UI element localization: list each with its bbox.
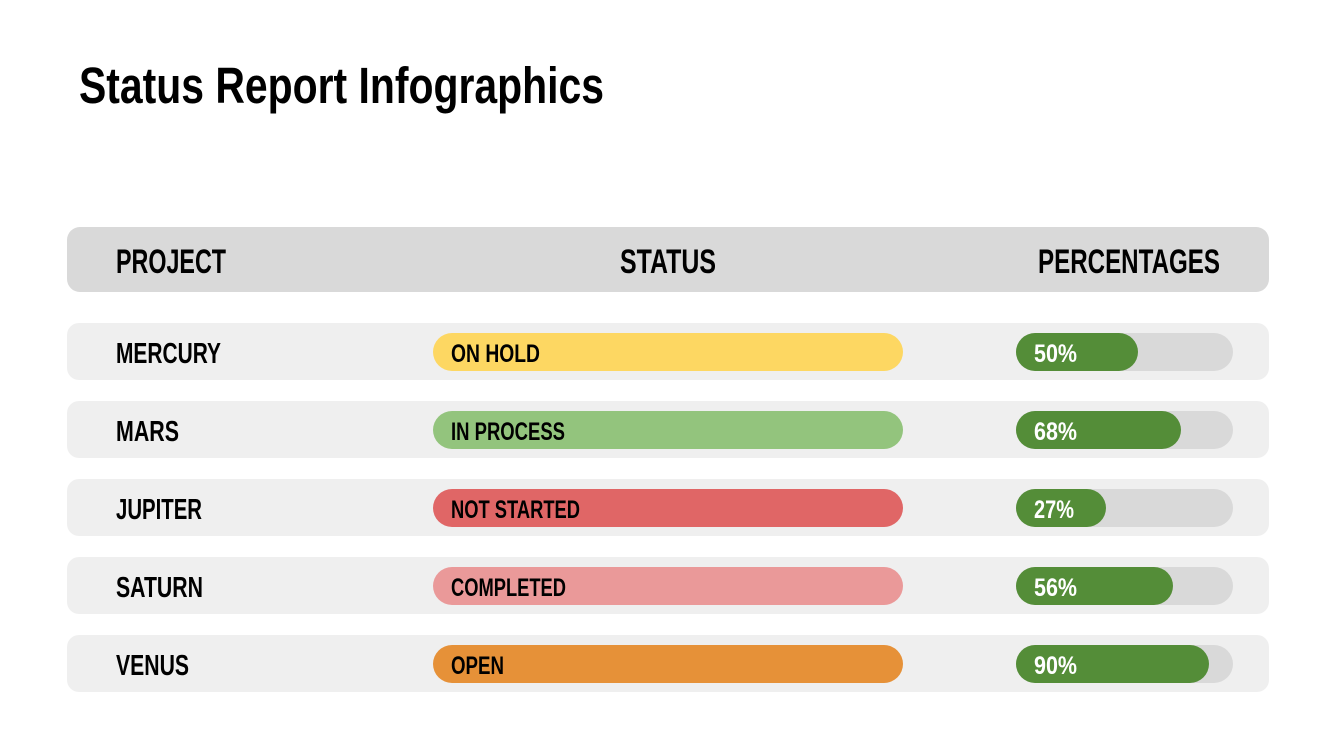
- status pill: in process: IN PROCESS: [451, 418, 565, 446]
- row: jupiter: [67, 479, 1269, 536]
- header: status: STATUS: [620, 243, 716, 281]
- progress bar: 68%: [1016, 411, 1233, 449]
- status pill: on hold: [433, 333, 903, 371]
- status pill: open: [433, 645, 903, 683]
- progress bar: 68%: 68%: [1034, 418, 1077, 446]
- progress bar: 56%: [1016, 567, 1233, 605]
- row: mars: [67, 401, 1269, 458]
- progress bar: 50%: 50%: [1034, 340, 1077, 368]
- row: venus: [67, 635, 1269, 692]
- title: Status Report Infographics: [79, 57, 604, 114]
- row: mars: MARS: [116, 416, 179, 448]
- status pill: completed: [433, 567, 903, 605]
- row: mercury: MERCURY: [116, 338, 221, 370]
- status pill: in process: [433, 411, 903, 449]
- progress bar: 27%: 27%: [1034, 496, 1074, 524]
- header: project: PROJECT: [116, 243, 226, 281]
- status pill: not started: NOT STARTED: [451, 496, 580, 524]
- header: percentages: PERCENTAGES: [1038, 243, 1220, 281]
- progress bar: 27%: [1016, 489, 1233, 527]
- progress bar: 90%: 90%: [1034, 652, 1077, 680]
- row: jupiter: JUPITER: [116, 494, 202, 526]
- status pill: on hold: ON HOLD: [451, 340, 540, 368]
- progress bar: 50%: [1016, 333, 1233, 371]
- row: saturn: SATURN: [116, 572, 203, 604]
- table header: [67, 227, 1269, 292]
- row: saturn: [67, 557, 1269, 614]
- row: mercury: [67, 323, 1269, 380]
- status pill: completed: COMPLETED: [451, 574, 566, 602]
- status pill: open: OPEN: [451, 652, 504, 680]
- status pill: not started: [433, 489, 903, 527]
- row: venus: VENUS: [116, 650, 189, 682]
- progress bar: 90%: [1016, 645, 1233, 683]
- progress bar: 56%: 56%: [1034, 574, 1077, 602]
